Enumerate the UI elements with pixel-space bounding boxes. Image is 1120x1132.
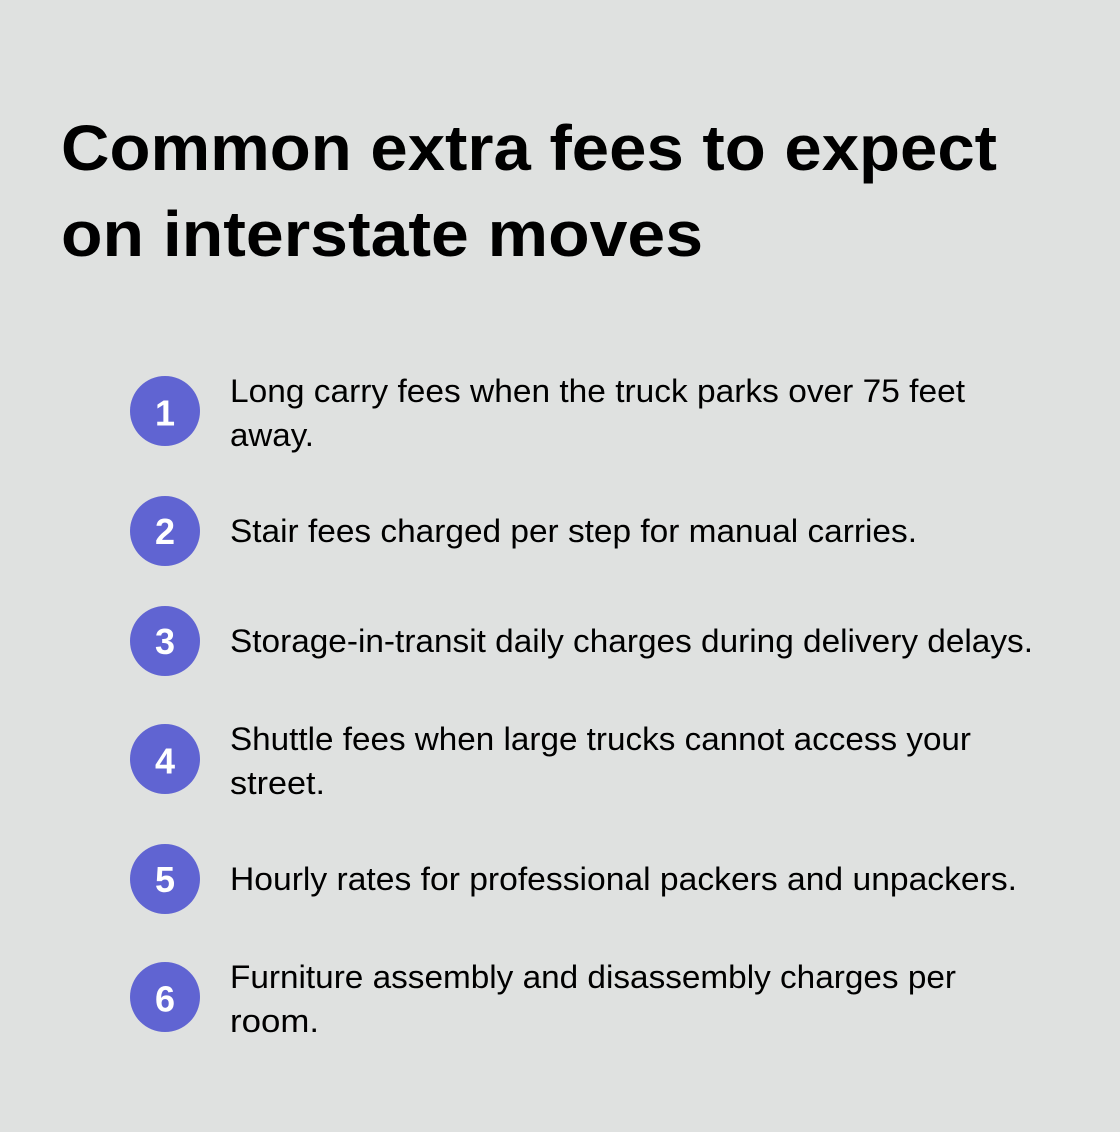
number badge 6: [130, 962, 200, 1032]
number badge 5: 5: [155, 859, 175, 900]
title: [61, 112, 997, 270]
text: furniture assembly: Furniture assembly and disassembly charges per: [230, 959, 956, 995]
number badge 3: 3: [155, 621, 175, 662]
text: shuttle fees: [230, 721, 971, 801]
number badge 2: 2: [155, 511, 175, 552]
list item 2: stair fees: [130, 496, 917, 566]
text: shuttle fees: street.: [230, 765, 325, 801]
text: storage-in-transit: Storage-in-transit daily charges during delivery delays.: [230, 623, 1033, 659]
number badge 6: 6: [155, 978, 175, 1020]
text: long carry fees: away.: [230, 417, 314, 453]
list item 4: shuttle fees: [130, 721, 971, 801]
number badge 3: [130, 606, 200, 676]
text: shuttle fees: Shuttle fees when large trucks cannot access your: [230, 721, 971, 757]
title: on interstate moves: [61, 198, 703, 270]
text: long carry fees: [230, 373, 965, 453]
text: furniture assembly: [230, 959, 956, 1039]
number badge 5: [130, 844, 200, 914]
list item 5: packers: [130, 844, 1017, 914]
number badge 2: [130, 496, 200, 566]
text: stair fees: Stair fees charged per step for manual carries.: [230, 513, 917, 549]
number badge 1: [130, 376, 200, 446]
number badge 4: [130, 724, 200, 794]
title: Common extra fees to expect: [61, 112, 997, 184]
number badge 4: 4: [155, 740, 175, 782]
list item 3: storage-in-transit: [130, 606, 1033, 676]
text: furniture assembly: room.: [230, 1003, 319, 1039]
text: long carry fees: Long carry fees when the truck parks over 75 feet: [230, 373, 965, 409]
text: packers: Hourly rates for professional packers and unpackers.: [230, 861, 1017, 897]
list item 1: long carry fees: [130, 373, 965, 453]
number badge 1: 1: [155, 392, 175, 434]
list item 6: furniture assembly: [130, 959, 956, 1039]
